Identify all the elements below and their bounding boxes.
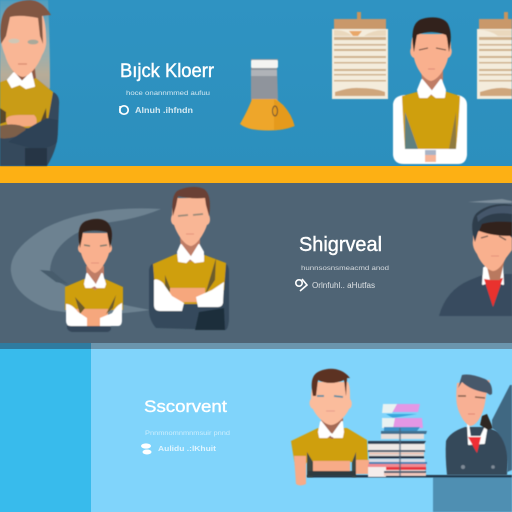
- text line: middle banner description: hunnsosnsmeacmd anod: [301, 265, 389, 272]
- heading: bottom banner: Sscorvent: [144, 397, 227, 416]
- icon: stack of books: [368, 404, 427, 477]
- icon: bottom banner badge: [141, 443, 152, 454]
- text line: bottom banner description: Pnnmnomnmnmsuir pnnd: [145, 431, 230, 437]
- graphic: swirl crescent: [11, 208, 161, 314]
- figure: woman in dark jacket with red scarf: [446, 374, 509, 475]
- strip: left transition: [0, 343, 91, 349]
- graphic: swirl shadow: [40, 270, 68, 284]
- figure: tall man with folded arms: [149, 187, 229, 330]
- text line: middle banner contact: Orlnfuhl.. aHutfas: [312, 281, 375, 290]
- icon: middle banner badge: [296, 279, 307, 291]
- icon: jar with amber base: [240, 59, 294, 130]
- panel: bottom banner main area: [91, 349, 512, 512]
- figure: man with crossed arms, top left: [0, 0, 59, 166]
- graphic: dark shape at right edge: [492, 385, 512, 472]
- figure: man in vest, top centre: [393, 17, 467, 164]
- text line: bottom banner contact: Aulidu .:lKhuit: [158, 444, 217, 453]
- text line: top banner contact: Alnuh .ihfndn: [135, 105, 193, 115]
- panel: middle banner background: [0, 183, 512, 344]
- desk: surface and pedestal: [307, 475, 512, 512]
- text line: top banner description: hoce onannmmed aufuu: [126, 90, 210, 97]
- panel: top banner background: [0, 0, 512, 167]
- figure: small man in vest: [65, 219, 123, 332]
- divider band: amber: [0, 166, 512, 183]
- icon: notice board right: [477, 12, 512, 99]
- figure: man with graduation cap and red tie: [439, 199, 512, 316]
- heading: top banner: Bıjck Kloerr: [120, 61, 215, 82]
- icon: top banner badge: [120, 106, 128, 114]
- figure: man in polo at desk: [291, 369, 382, 486]
- panel: bottom banner left column: [0, 349, 91, 512]
- strip: right transition: [91, 343, 512, 349]
- heading: middle banner: Shigrveal: [299, 234, 382, 256]
- icon: notice board left: [332, 12, 388, 99]
